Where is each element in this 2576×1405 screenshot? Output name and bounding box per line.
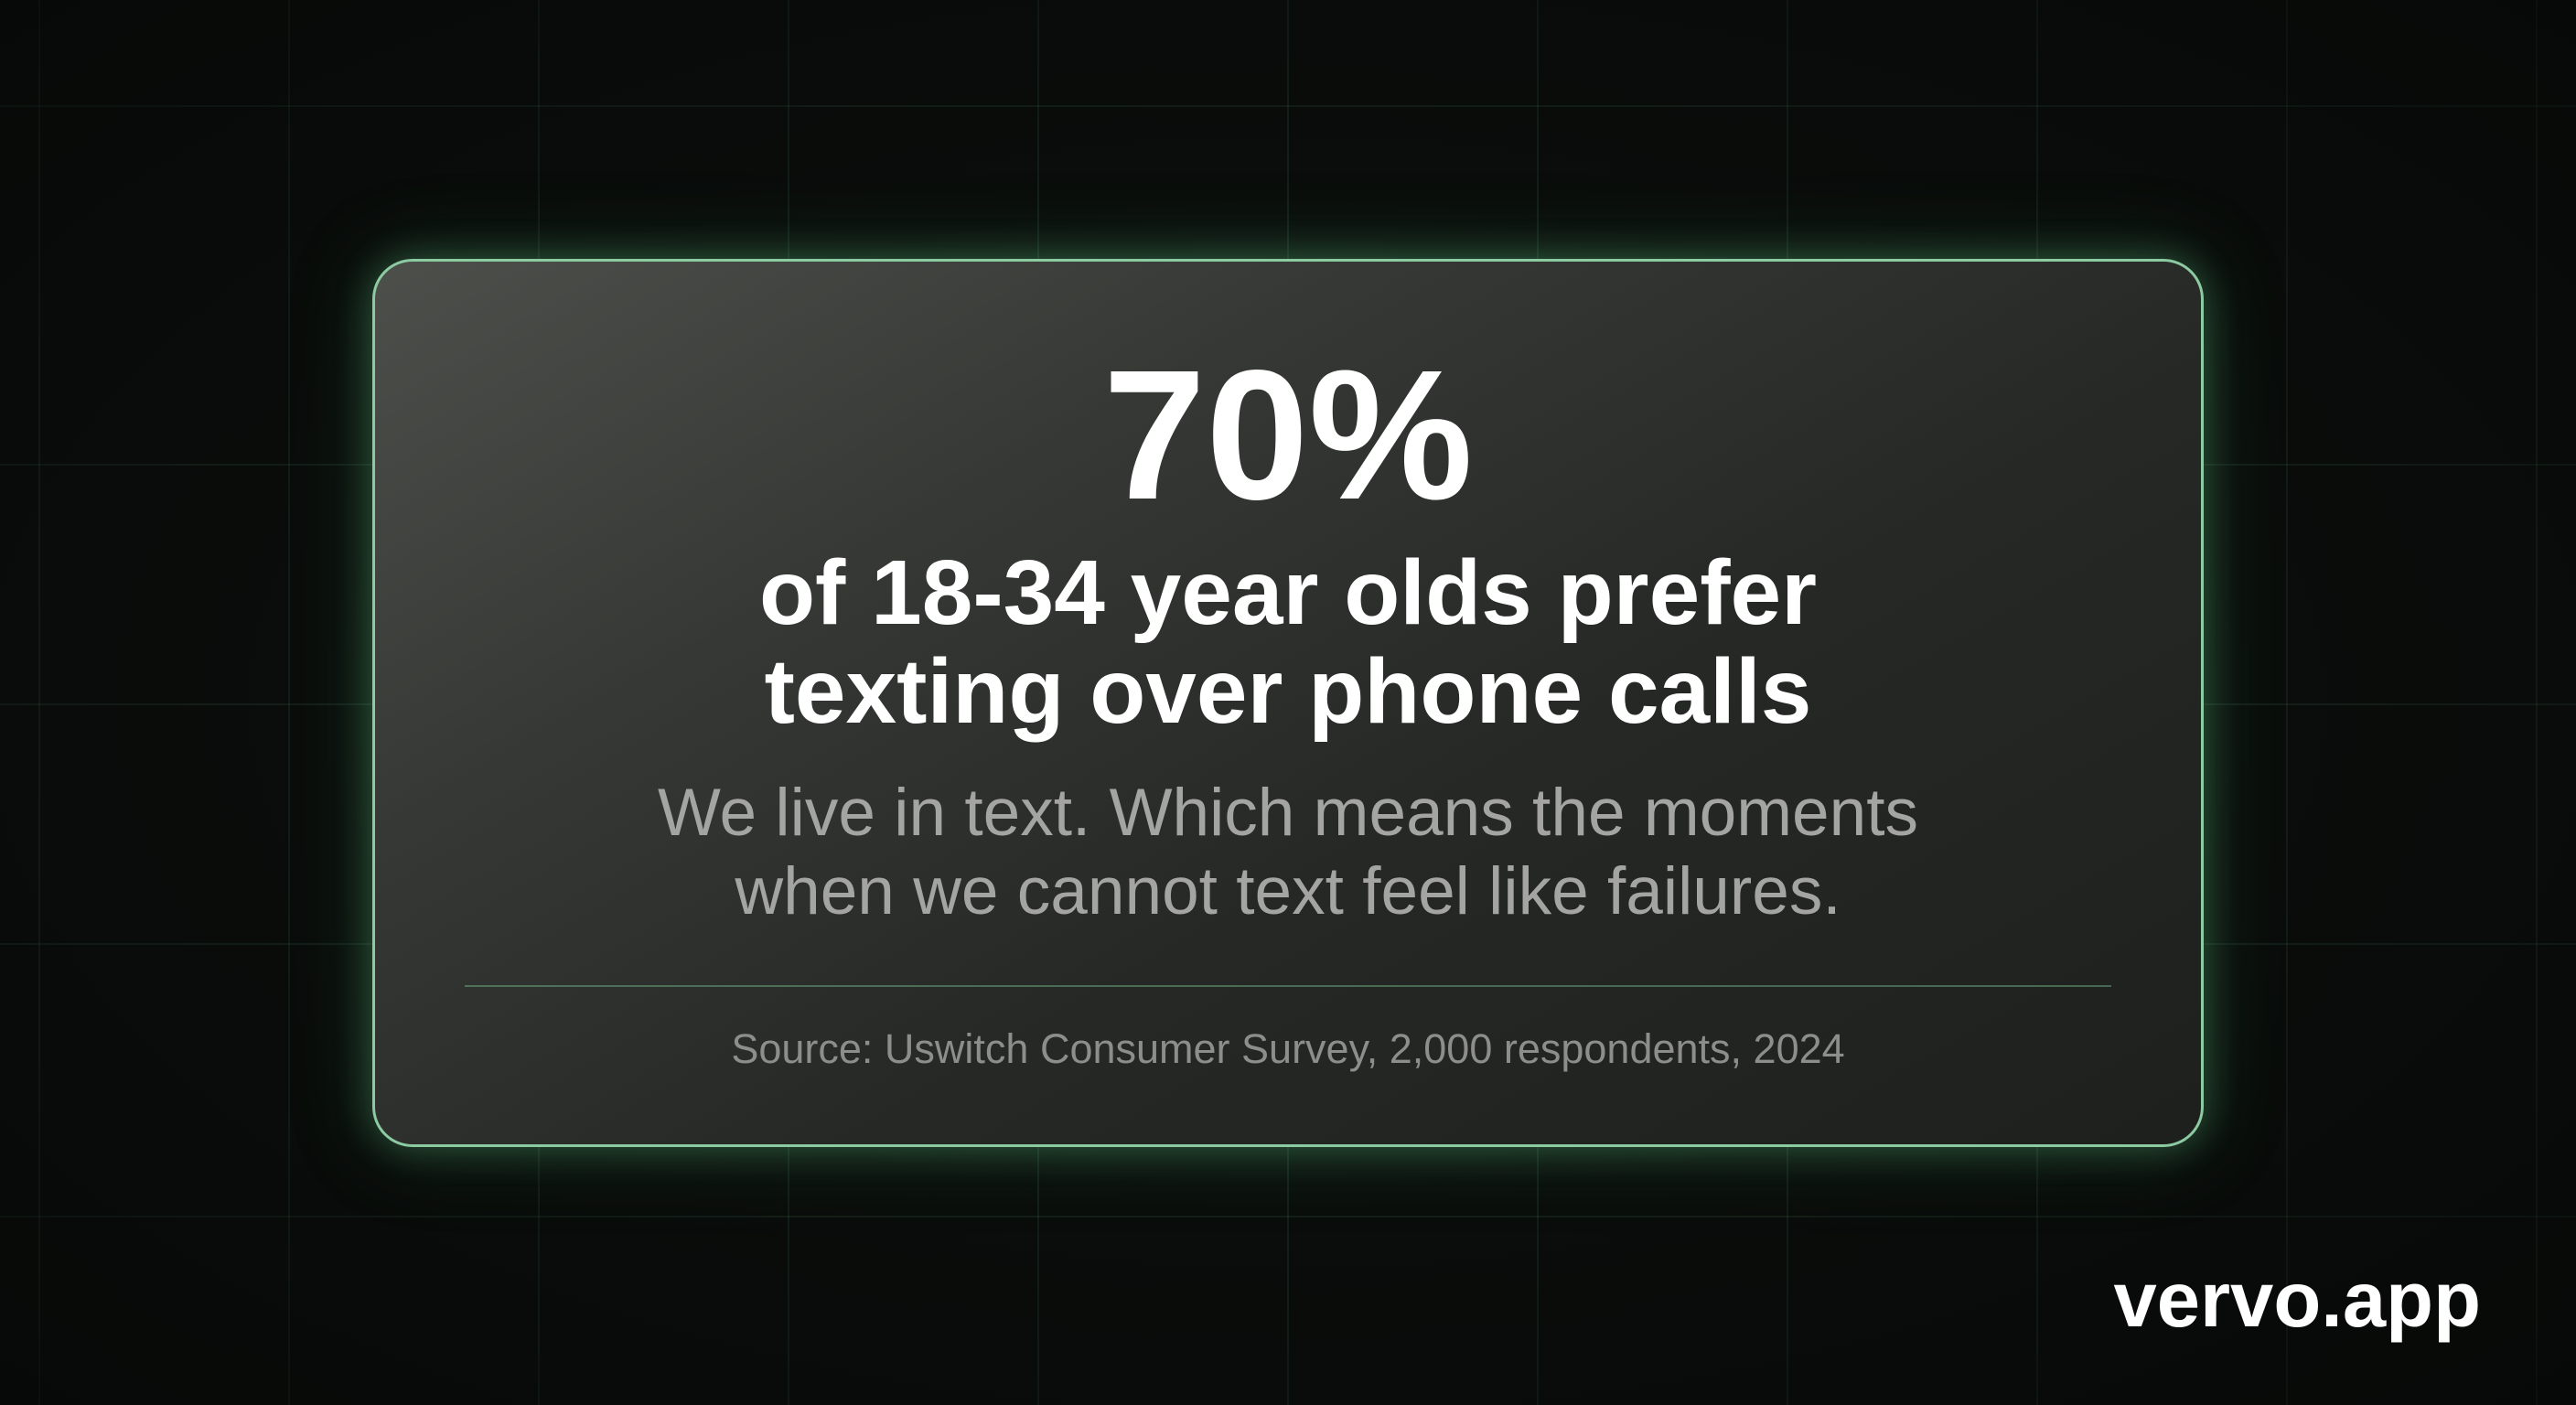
subtitle xyxy=(658,776,1918,928)
headline: of 18-34 year olds prefer xyxy=(759,542,1817,644)
big stat 70%: 70% xyxy=(1103,331,1473,538)
subtitle: We live in text. Which means the moments xyxy=(658,776,1918,850)
panel: stat card xyxy=(372,259,2204,1147)
headline xyxy=(759,542,1817,743)
brand: vervo.app: vervo.app xyxy=(2113,1257,2481,1344)
divider xyxy=(465,985,2111,987)
source text: Source: Uswitch Consumer Survey, 2,000 respondents, 2024 xyxy=(731,1025,1845,1072)
subtitle: when we cannot text feel like failures. xyxy=(735,854,1841,928)
headline: texting over phone calls xyxy=(765,640,1811,743)
